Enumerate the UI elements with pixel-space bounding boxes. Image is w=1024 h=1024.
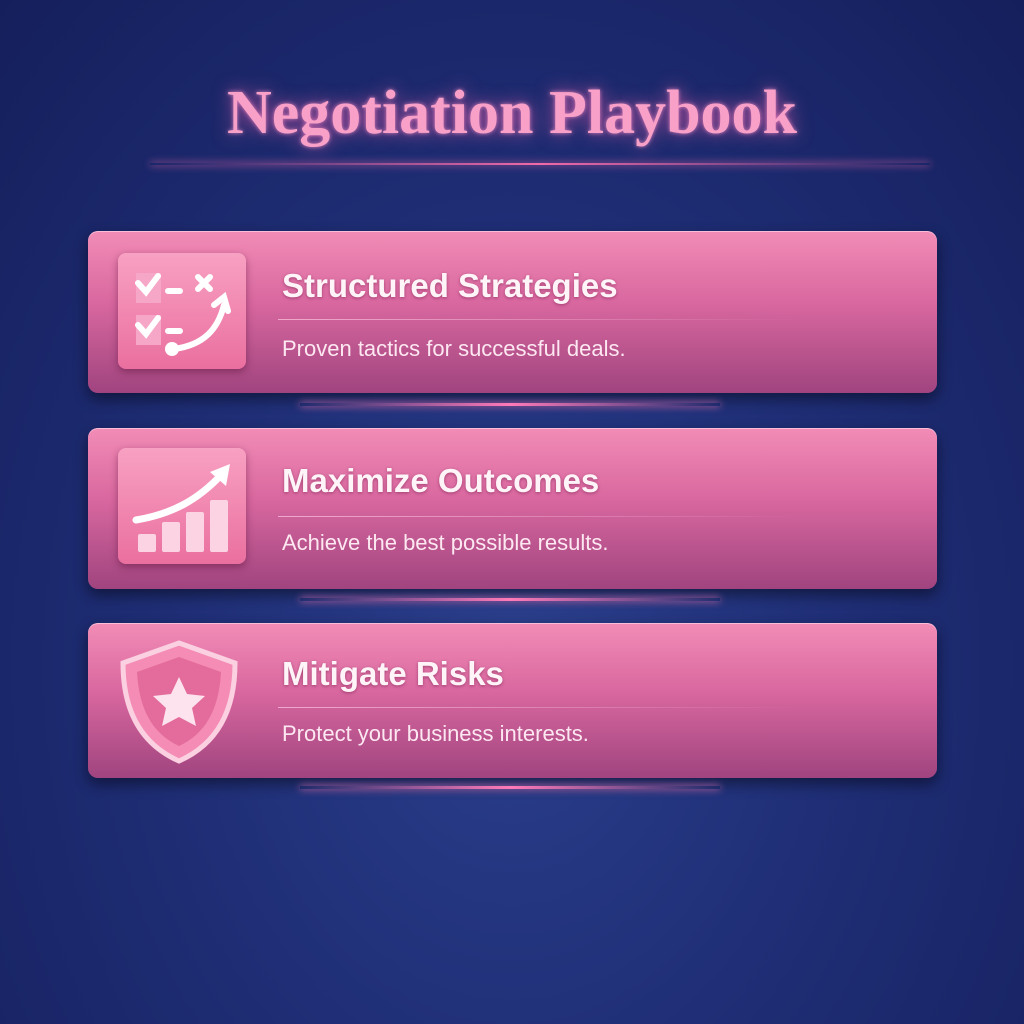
icon: shield with star	[120, 640, 238, 764]
text: Achieve the best possible results.	[282, 530, 609, 555]
panel: structured strategies	[88, 231, 937, 393]
text: Proven tactics for successful deals.	[282, 336, 626, 361]
heading: Mitigate Risks	[282, 655, 504, 692]
icon: growth chart	[118, 448, 246, 564]
heading: Maximize Outcomes	[282, 462, 599, 499]
title: Negotiation Playbook	[227, 79, 797, 147]
panel: maximize outcomes	[88, 428, 937, 589]
heading: Structured Strategies	[282, 267, 618, 304]
panel: mitigate risks	[88, 623, 937, 778]
icon: checklist with arrow	[118, 253, 246, 369]
text: Protect your business interests.	[282, 721, 589, 746]
